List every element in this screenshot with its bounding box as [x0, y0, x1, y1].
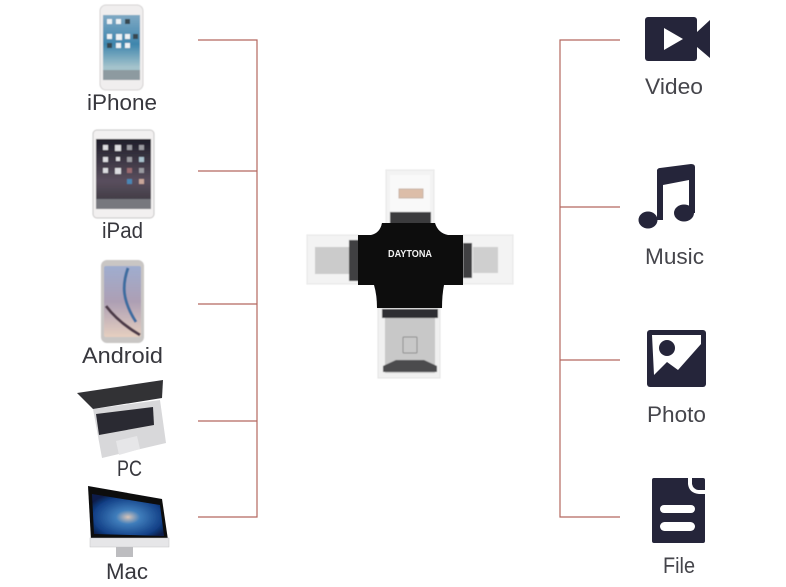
product: DAYTONA adapter	[307, 170, 513, 378]
icon: video	[645, 17, 710, 61]
label: Video: Video	[645, 74, 703, 99]
bottom card slot	[378, 308, 440, 378]
label: Music: Music	[645, 244, 704, 269]
device: iPad	[93, 130, 154, 218]
label: Photo: Photo	[647, 402, 706, 427]
label: iPhone: iPhone	[87, 90, 157, 115]
icon: photo	[647, 330, 706, 387]
device: Android	[101, 260, 144, 343]
icon: music	[638, 164, 695, 228]
label: Mac: Mac	[106, 559, 148, 584]
brand: DAYTONA: DAYTONA	[388, 249, 432, 260]
top lightning connector	[386, 170, 434, 224]
right connector	[463, 235, 513, 284]
label: iPad: iPad	[102, 218, 143, 243]
device: iPhone	[100, 5, 143, 90]
device: PC laptop	[77, 380, 166, 458]
device: Mac	[88, 486, 169, 557]
adapter body	[358, 223, 463, 308]
left connector	[307, 235, 359, 284]
label: PC: PC	[117, 456, 142, 481]
icon: file	[652, 478, 705, 543]
label: File: File	[663, 553, 695, 578]
left connector lines	[198, 40, 257, 517]
right connector lines	[560, 40, 620, 517]
label: Android: Android	[82, 343, 163, 368]
